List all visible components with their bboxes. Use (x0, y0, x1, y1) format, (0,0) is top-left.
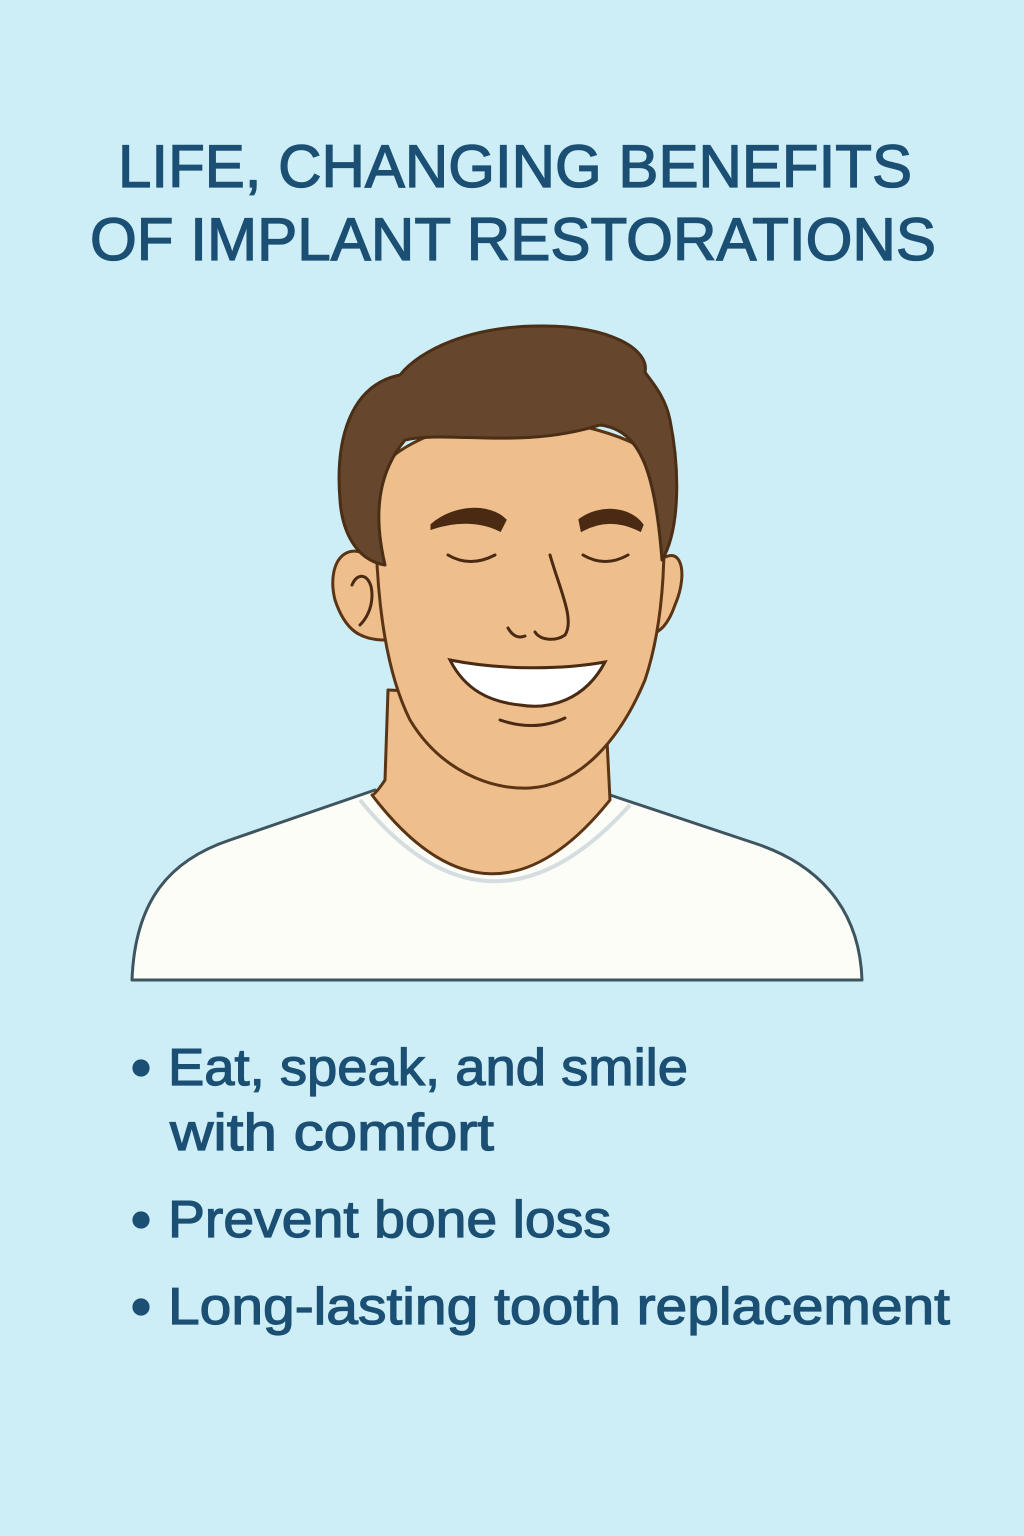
hair (339, 326, 677, 565)
bullet list (133, 1039, 951, 1336)
title: OF IMPLANT RESTORATIONS (90, 206, 936, 273)
title (90, 133, 936, 273)
bullet 2: Prevent bone loss (168, 1191, 611, 1249)
bullet 1: with comfort (169, 1104, 495, 1162)
illustration: smiling man (132, 326, 862, 980)
shirt (132, 790, 862, 980)
neck (372, 690, 610, 874)
bullet 1 (133, 1039, 688, 1162)
ears (333, 551, 385, 640)
bullet 1: Eat, speak, and smile (168, 1039, 688, 1097)
face (376, 420, 664, 788)
bullet 3: Long-lasting tooth replacement (168, 1278, 951, 1336)
title: LIFE, CHANGING BENEFITS (118, 133, 912, 200)
face features (352, 509, 642, 726)
